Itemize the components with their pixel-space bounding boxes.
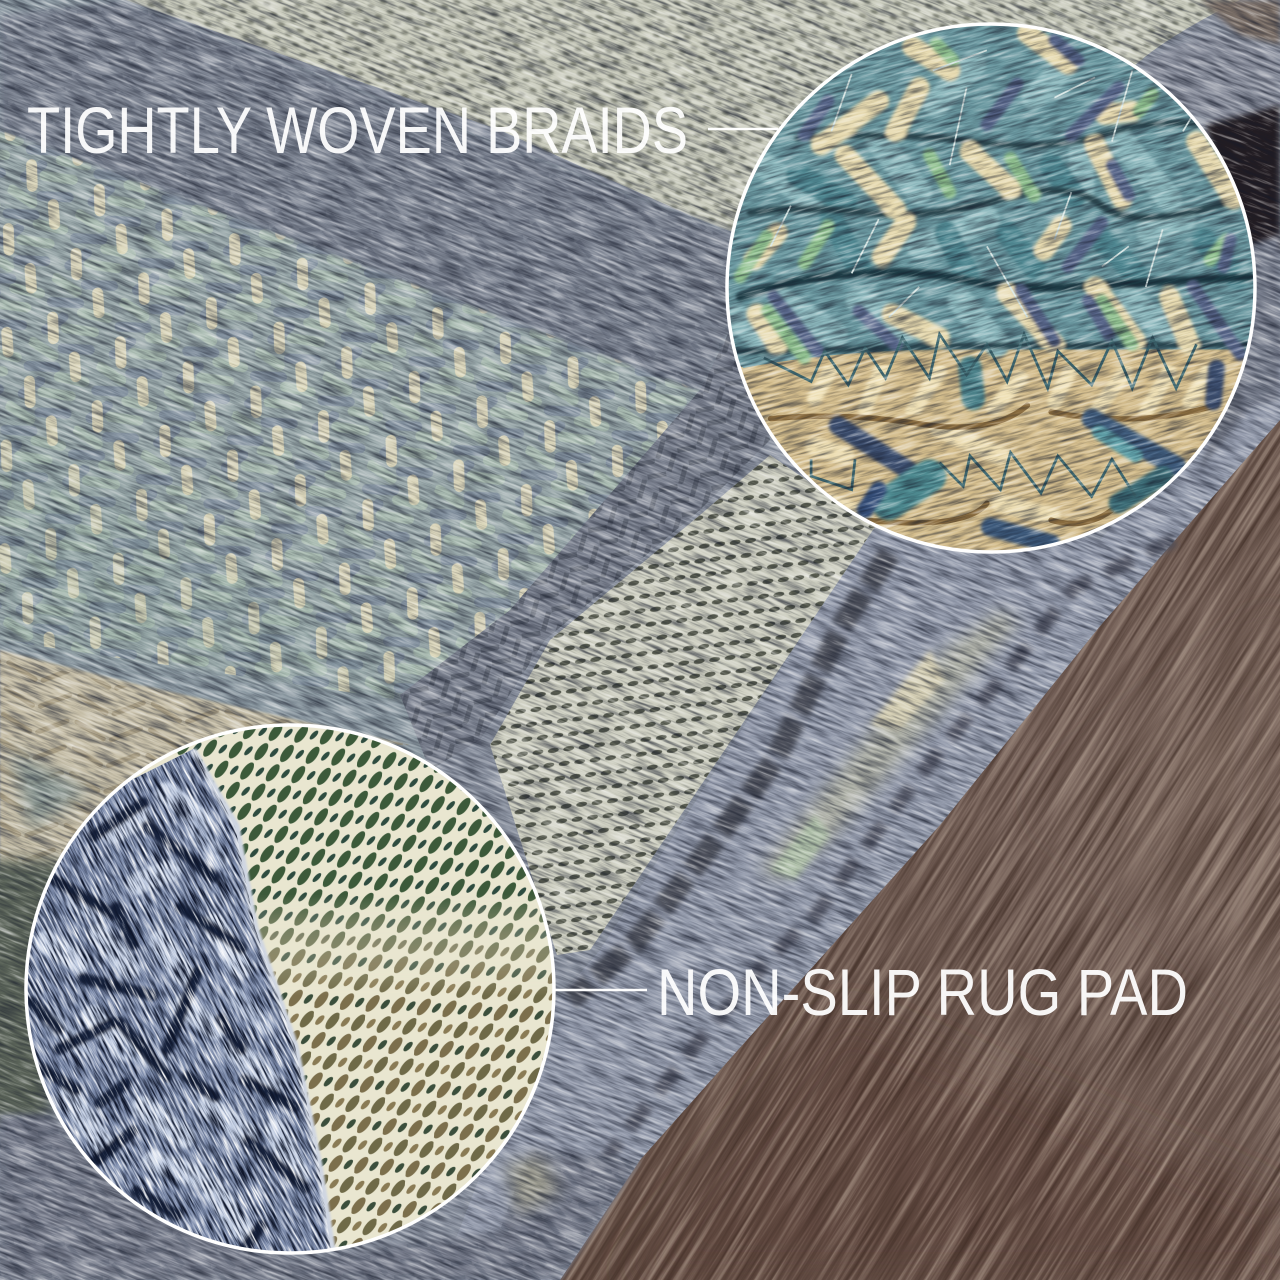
mesh holes: green upper, olive lower	[178, 726, 552, 987]
stray fibres	[771, 50, 1203, 317]
label: tightly woven braids: TIGHTLY WOVEN BRAIDS	[27, 93, 688, 167]
top right rug corner	[1145, 0, 1280, 410]
label: non-slip rug pad: NON-SLIP RUG PAD	[657, 955, 1188, 1029]
zigzag stitching	[764, 334, 1196, 388]
non-slip pad at top	[125, 0, 1240, 238]
circle: braid close-up	[723, 22, 1260, 560]
lower rug braids	[440, 330, 1280, 1280]
grey fold edge	[400, 300, 770, 770]
grey top band	[0, 0, 745, 392]
blue braid	[18, 749, 333, 1266]
cream braid band lower left	[0, 650, 410, 875]
circle: pad close-up	[18, 722, 559, 1266]
lower left strip	[0, 860, 640, 1280]
rug main body	[0, 0, 770, 770]
soft strands group	[737, 33, 1251, 544]
non-slip pad visible under fold	[490, 455, 875, 955]
tan lower braids	[740, 349, 1244, 550]
